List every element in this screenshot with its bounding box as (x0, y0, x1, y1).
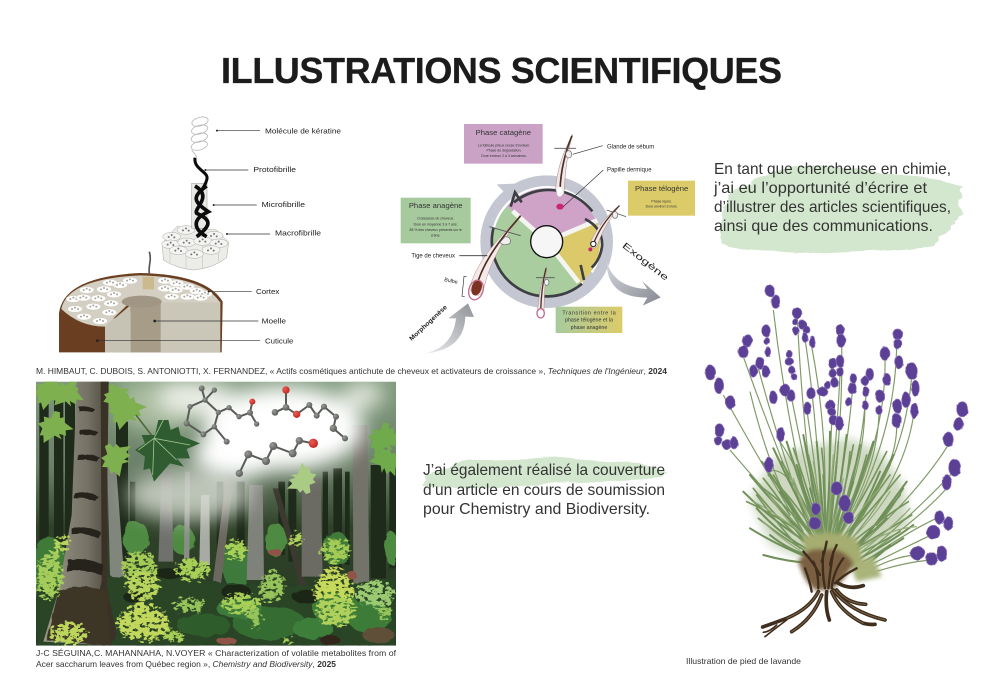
hair: transition follicle (536, 267, 555, 318)
exogen arrow (607, 262, 661, 306)
intro paragraph (713, 161, 951, 235)
box: phase télogène: Dure environ 3 mois. (646, 205, 678, 209)
label: macrofibrille: Macrofibrille (275, 231, 321, 238)
lighter leaves (753, 455, 917, 558)
green brush stroke (720, 166, 964, 254)
callout: bulbe (444, 276, 467, 296)
box: transition phase: Transition entre la (562, 310, 616, 316)
label: protofibrille: Protofibrille (253, 167, 296, 174)
forest floor (36, 576, 396, 646)
label: morphogenèse: Morphogenèse (408, 304, 449, 342)
icon: keratin molecule coil (190, 115, 209, 157)
cover paragraph: pour Chemistry and Biodiversity. (423, 501, 650, 518)
roots and woody stems (763, 542, 885, 637)
molecule: third structure (236, 437, 318, 477)
cover paragraph: d’un article en cours de soumission (423, 482, 665, 499)
callout: glande de sébum (573, 145, 654, 154)
dark inner arcs (492, 190, 602, 296)
forest background (36, 382, 396, 646)
hair cross-section cylinder (59, 252, 223, 352)
box: transition phase: phase télogène et la (565, 318, 613, 324)
box: phase anagène: crâne. (431, 234, 441, 238)
box: phase télogène (628, 181, 695, 216)
bright fern clusters (33, 529, 397, 648)
box: phase télogène: Phase repos. (651, 199, 672, 203)
mid green patches (36, 520, 396, 598)
box: phase anagène: Croissance du cheveux. (417, 217, 454, 221)
birch tree foreground (43, 382, 117, 646)
intro paragraph: d’illustrer des articles scientifiques, (714, 199, 951, 216)
callout: bulbe: Bulbe (444, 277, 458, 286)
callout: papille dermique (563, 168, 652, 207)
box: phase télogène: Phase télogène (635, 184, 688, 193)
callout labels and arrows (96, 130, 270, 342)
olive base of plant (802, 532, 882, 582)
label: cuticule: Cuticule (265, 339, 293, 346)
label: cortex: Cortex (256, 289, 280, 296)
box: phase catagène: Dure environ 2 à 3 semaines. (481, 154, 527, 158)
title: ILLUSTRATIONS SCIENTIFIQUES (221, 50, 782, 91)
morphogenesis arrow (423, 303, 474, 354)
panel: lavender plant illustration (705, 285, 968, 637)
box: phase anagène: Dure en moyenne 3 à 7 ans. (414, 222, 458, 226)
sector: anagen phase (493, 206, 580, 295)
box: phase catagène (464, 124, 543, 164)
callout: tige de cheveux: Tige de cheveux (411, 254, 455, 260)
brown woody base (798, 549, 853, 590)
box: phase catagène: Phase catagène (476, 128, 531, 137)
hair: anagen follicle (466, 215, 522, 302)
cover paragraph: J’ai également réalisé la couverture (423, 462, 665, 479)
foliage mass (750, 438, 910, 562)
box: phase anagène: Phase anagène (409, 201, 462, 210)
flower stems (723, 310, 953, 573)
box: phase anagène: 85 % des cheveux présents sur le (410, 228, 462, 232)
darker undergrowth (177, 592, 391, 640)
maple leaf (135, 415, 200, 482)
intro paragraph: En tant que chercheuse en chimie, (714, 161, 951, 178)
label: molécule de kératine: Molécule de kératine (265, 128, 341, 135)
sector: catagen phase (507, 188, 596, 242)
callout: tige de cheveux (411, 254, 487, 260)
panel: hair fibre structure diagram (59, 115, 341, 352)
hair: catagen follicle (554, 134, 576, 210)
central fog (127, 470, 253, 520)
intro paragraph: j’ai eu l’opportunité d’écrire et (713, 180, 928, 197)
hair: telogen follicle (588, 205, 626, 251)
molecule: second structure (272, 386, 348, 441)
white mist (157, 382, 383, 478)
reddish ground stones (217, 549, 394, 645)
cover paragraph (423, 462, 665, 518)
label: exogène: Exogène (620, 240, 670, 283)
citation: forest cover article: Acer saccharum leaves from Québec region », Chemistry and Biodiversity, 2025 (36, 659, 336, 669)
distant dark trunks (39, 395, 396, 578)
box: phase catagène: Phase de dégradation. (486, 149, 522, 153)
green brush stroke (423, 458, 668, 487)
box: transition phase (556, 307, 622, 333)
panel: intro text with green brush (713, 161, 964, 254)
intro paragraph: ainsi que des communications. (714, 218, 933, 235)
protofibril strand (195, 158, 207, 192)
sector dividers (513, 211, 597, 282)
inner circle of cycle (531, 226, 563, 258)
light maple foliage (36, 382, 396, 494)
dark earth patches (123, 568, 340, 645)
grey cycle ring with arrowheads (486, 181, 610, 303)
additional dense leaves (747, 442, 912, 560)
sector: telogen phase (547, 221, 600, 284)
panel: hair growth cycle diagram (401, 124, 695, 354)
label: moelle: Moelle (262, 319, 286, 326)
box: phase anagène (401, 198, 471, 243)
callout: papille dermique: Papille dermique (607, 168, 652, 174)
macrofibril bundle (162, 226, 229, 270)
lavender flower heads (705, 285, 968, 566)
molecule: first structure (184, 385, 259, 445)
callout: glande de sébum: Glande de sébum (607, 145, 654, 151)
citation: forest cover article (36, 648, 397, 669)
label: microfibrille: Microfibrille (262, 202, 305, 209)
mid trunks (108, 425, 370, 586)
leaves (743, 432, 913, 568)
soft canopy glow (117, 378, 197, 432)
panel: cover article text with green brush (423, 458, 668, 518)
citation: forest cover article: J-C SÉGUINA,C. MAHANNAHA, N.VOYER « Characterization of volatile metabolites from of (36, 648, 397, 658)
box: phase catagène: La follicule pileux cesse d'évoluer. (478, 143, 530, 147)
citation: lavender caption: Illustration de pied de lavande (686, 656, 801, 666)
citation: hair article: M. HIMBAUT, C. DUBOIS, S. ANTONIOTTI, X. FERNANDEZ, « Actifs cosmétiques antichute de cheveux et activateurs de croissance », Techniques de l'Ingénieur, 2024 (36, 366, 667, 376)
microfibril twisted strands (192, 183, 208, 237)
box: transition phase: phase anagène (571, 325, 607, 331)
panel: forest cover painting (32, 374, 406, 648)
